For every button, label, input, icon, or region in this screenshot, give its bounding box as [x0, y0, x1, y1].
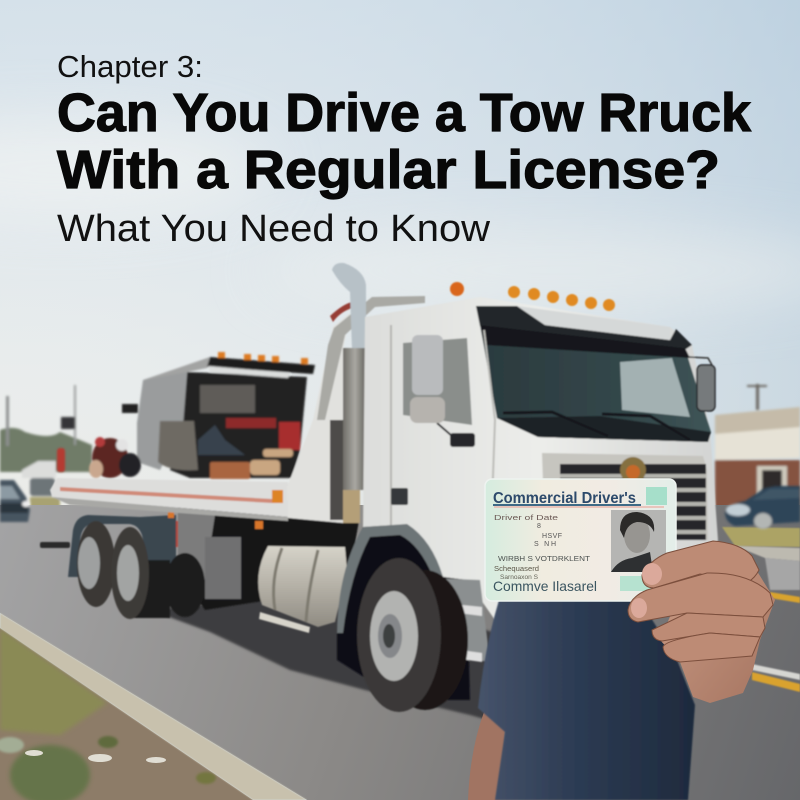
side mirrors [410, 335, 715, 423]
sky background [0, 0, 800, 530]
palm and wrist [660, 560, 775, 703]
chassis and rear fender [40, 505, 360, 610]
rear wheels [77, 521, 205, 619]
license card: WIRBH S VOTDRKLENT [498, 554, 590, 563]
road [0, 505, 800, 800]
flatbed cargo and load [57, 352, 315, 479]
license card: 8 [537, 523, 541, 530]
license card: Sarnoaxon S [500, 575, 538, 581]
curb [0, 613, 307, 800]
parked car left [0, 480, 30, 522]
roof visor and marker lights [450, 282, 692, 349]
shirt [478, 600, 695, 800]
license photo [611, 510, 666, 572]
license card: Driver of Date [494, 513, 558, 522]
windshield [480, 325, 711, 442]
text block: title [57, 49, 752, 250]
heading: Can You Drive a Tow Rruck [57, 83, 752, 143]
parked car right [725, 486, 800, 529]
license card [485, 479, 676, 601]
heading: With a Regular License? [57, 140, 720, 200]
license card: Commercial Driver's [493, 490, 636, 507]
headboard frame [287, 296, 425, 523]
cab body [363, 297, 718, 620]
road shadow below truck [150, 590, 560, 740]
license card: HSVF [542, 533, 562, 540]
fingers [628, 541, 773, 662]
fuel tank and step [258, 546, 347, 633]
tow truck [40, 263, 718, 712]
right grass verge and road markings [722, 527, 800, 692]
background scenery: trees, poles and building [0, 384, 800, 511]
license card: Commve Ilasarel [493, 578, 597, 594]
door and side window [391, 325, 495, 560]
chapter label: Chapter 3: [57, 49, 203, 84]
license card: S NH [534, 541, 556, 548]
license card: Schequaserd [494, 566, 539, 573]
flatbed deck [50, 478, 288, 521]
wheel arch and lower bumper [337, 524, 490, 700]
exhaust stack [332, 263, 367, 523]
grille and emblem [542, 453, 708, 540]
wipers [503, 412, 690, 440]
subheading: What You Need to Know [57, 208, 491, 250]
fingernails [631, 563, 662, 618]
person holding license [468, 479, 775, 800]
heading [57, 83, 752, 200]
roadside grass, soil and plants [0, 628, 253, 800]
front wheel [357, 558, 468, 712]
arm [468, 712, 505, 800]
hand [628, 541, 775, 703]
